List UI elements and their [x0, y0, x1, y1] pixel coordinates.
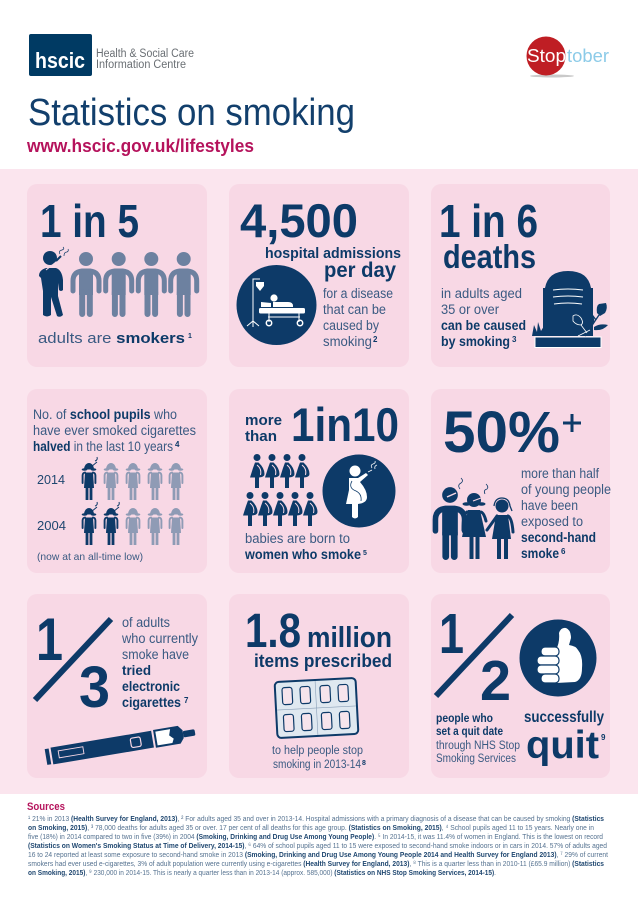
subheading: hospital admissions — [265, 245, 401, 262]
header logo: Stoptober: Stop — [527, 46, 566, 66]
icon: five people, one smoking — [39, 247, 197, 317]
header logo: hscic: Information Centre — [96, 59, 186, 71]
caption: to help people stop — [272, 745, 363, 757]
body text — [436, 713, 520, 765]
heading: deaths: deaths — [443, 238, 536, 275]
panel: 1 in 10 babies — [229, 389, 409, 573]
stat: 1 in 6: 1 in 6 — [439, 195, 538, 247]
body text — [121, 615, 198, 710]
body text — [441, 286, 526, 349]
icon: blister pack of tablets — [275, 678, 358, 738]
fraction: one half — [436, 602, 512, 713]
pink background band — [0, 169, 638, 794]
label: 2004: 2004 — [37, 518, 66, 533]
panel: 4,500 hospital admissions — [229, 184, 409, 367]
icon: gravestone and flowers — [532, 271, 608, 348]
sources text: on Smoking, 2015), ³ 78,000 deaths for adults aged 35 or over. 17 per cent of all deaths for this age group. (Statistics on Smoking, 2015), ⁴ School pupils aged 11 to 15 years. Nearly one in — [28, 823, 594, 832]
subheading: per day: per day — [324, 259, 396, 282]
caption — [272, 745, 366, 771]
header logo: Stoptober — [526, 36, 609, 78]
body text: 4 — [175, 440, 180, 449]
panel: 50% plus second-hand smoke — [431, 389, 611, 573]
footnote 9: 9 — [601, 733, 606, 742]
label: more than: more — [245, 413, 282, 429]
body text: that can be — [323, 302, 386, 317]
body text: 3 — [512, 335, 517, 344]
stat: 1.8: 1.8 — [245, 605, 301, 658]
icon: rows of pregnant women — [243, 454, 318, 526]
header logo: hscic — [29, 34, 194, 76]
header logo: Stoptober: tober — [567, 46, 609, 66]
sources text: smokers had ever used e-cigarettes, 3% of adult population were currently using e-cigarettes (Health Survey for England, 2013), ⁸ This is a quarter less than in 2010-11 (£65.9 million) (Statistics — [28, 859, 604, 868]
stat: 4,500: 4,500 — [240, 194, 358, 247]
body text: smoking — [323, 334, 372, 349]
header logo: hscic: Health & Social Care — [96, 48, 194, 60]
icon: family of three — [435, 478, 513, 559]
body text: smoke — [521, 546, 559, 561]
label: more than — [245, 413, 282, 445]
sources text: five (18%) in 2014 compared to two in five (39%) in 2004 (Smoking, Drinking and Drug Use Among Young People). ⁵ In 2014-15, it was 11.4% of women in England. This is the lowest on record — [28, 832, 603, 841]
fraction: one third: 3 — [79, 655, 110, 720]
body text: cigarettes — [122, 695, 181, 710]
body text: can be caused — [441, 318, 526, 333]
caption: 5 — [363, 550, 367, 557]
fraction: one half: 2 — [480, 649, 511, 713]
stat: quit: quit — [526, 724, 599, 767]
caption: babies are born to — [245, 531, 350, 546]
sources heading: Sources — [27, 801, 65, 813]
body text: have ever smoked cigarettes — [33, 423, 196, 438]
fraction: one third: 1 — [36, 606, 63, 673]
sources text — [28, 814, 609, 877]
body text: in adults aged — [441, 286, 522, 301]
body text: exposed to — [521, 514, 583, 529]
body text: by smoking — [441, 334, 510, 349]
body text: caused by — [323, 318, 379, 333]
body text: 6 — [561, 547, 566, 556]
icon: hospital bed — [236, 265, 316, 345]
body text: Smoking Services — [436, 753, 516, 765]
body text: set a quit date — [436, 726, 503, 738]
sources text: (Statistics on Women's Smoking Status at Time of Delivery, 2014-15), ⁶ 64% of school pupils aged 11 to 15 were exposed to second-hand smoke indoors or in cars in 2014. 57% of adults aged — [28, 841, 607, 850]
body text: second-hand — [521, 530, 596, 545]
label: successfully: successfully — [524, 709, 604, 726]
body text: smoke have — [122, 647, 189, 662]
body text — [521, 466, 611, 561]
body text: 2 — [373, 335, 378, 344]
subheading: items prescribed — [254, 650, 392, 671]
body text: No. of school pupils who — [33, 407, 177, 422]
fraction: one half: 1 — [439, 602, 464, 666]
panel: 1 in 6 deaths — [431, 184, 610, 367]
body text: 35 or over — [441, 302, 500, 317]
sources text: 16 to 24 reported at least some exposure to second-hand smoke in 2013 (Smoking, Drinking and Drug Use Among Young People 2014 and Health Survey for England 2013), ⁷ 29% of current — [28, 850, 609, 859]
title: Statistics on smoking — [28, 92, 355, 134]
panel: one third e-cigarettes — [27, 594, 207, 778]
body text: who currently — [121, 631, 198, 646]
caption: 8 — [362, 760, 366, 767]
panel: one half successfully quit — [431, 594, 610, 778]
body text: through NHS Stop — [436, 740, 520, 752]
note: (now at an all-time low) — [37, 551, 143, 563]
panel: school pupils — [27, 389, 207, 573]
body text: of adults — [122, 615, 170, 630]
panel: 1 in 5 adults: 1 — [188, 333, 192, 340]
body text: electronic — [122, 679, 181, 694]
panel: 1.8 million items prescribed — [229, 594, 409, 778]
body text: people who — [436, 713, 493, 725]
icon: electronic cigarette — [45, 723, 196, 766]
label: 2014: 2014 — [37, 472, 65, 487]
caption: smoking in 2013-14 — [273, 759, 362, 771]
body text: for a disease — [323, 286, 393, 301]
caption: women who smoke — [244, 547, 361, 562]
stat: 50%: 50% — [443, 400, 560, 465]
website link: www.hscic.gov.uk/lifestyles — [26, 136, 254, 156]
sources text: ¹ 21% in 2013 (Health Survey for England, 2013), ² For adults aged 35 and over in 2013-14. Hospital admissions with a primary diagnosis of a disease that can be caused by smoking (Statistics — [28, 814, 604, 823]
body text: 7 — [184, 696, 189, 705]
body text: more than half — [521, 466, 599, 481]
caption: adults are smokers — [38, 330, 185, 347]
caption — [244, 531, 367, 562]
sources text: on Smoking, 2015), ⁹ 230,000 in 2014-15. This is nearly a quarter less than in 2013-14 (approx. 585,000) (Statistics on NHS Stop Smoking Services, 2014-15). — [28, 868, 496, 877]
body text: of young people — [521, 482, 611, 497]
body text — [323, 286, 393, 349]
plus sign — [563, 414, 581, 432]
header logo: hscic: hscic — [35, 48, 85, 73]
stat: 1 in 10: 1in10 — [291, 398, 399, 451]
fraction: one third — [35, 606, 111, 720]
label: more than: than — [245, 429, 277, 445]
body text: have been — [521, 498, 578, 513]
icon: thumbs up — [520, 620, 596, 696]
body text: tried — [122, 663, 151, 678]
panel: 1 in 5 adults — [27, 184, 207, 367]
icon: pregnant woman smoking — [322, 454, 396, 528]
icon row: 2004 girls — [82, 502, 183, 545]
stat unit: million: million — [307, 622, 392, 654]
body text: halved in the last 10 years — [33, 439, 173, 454]
body text — [33, 407, 196, 454]
icon row: 2014 girls — [82, 457, 183, 500]
stat: 1 in 5: 1 in 5 — [40, 195, 139, 247]
